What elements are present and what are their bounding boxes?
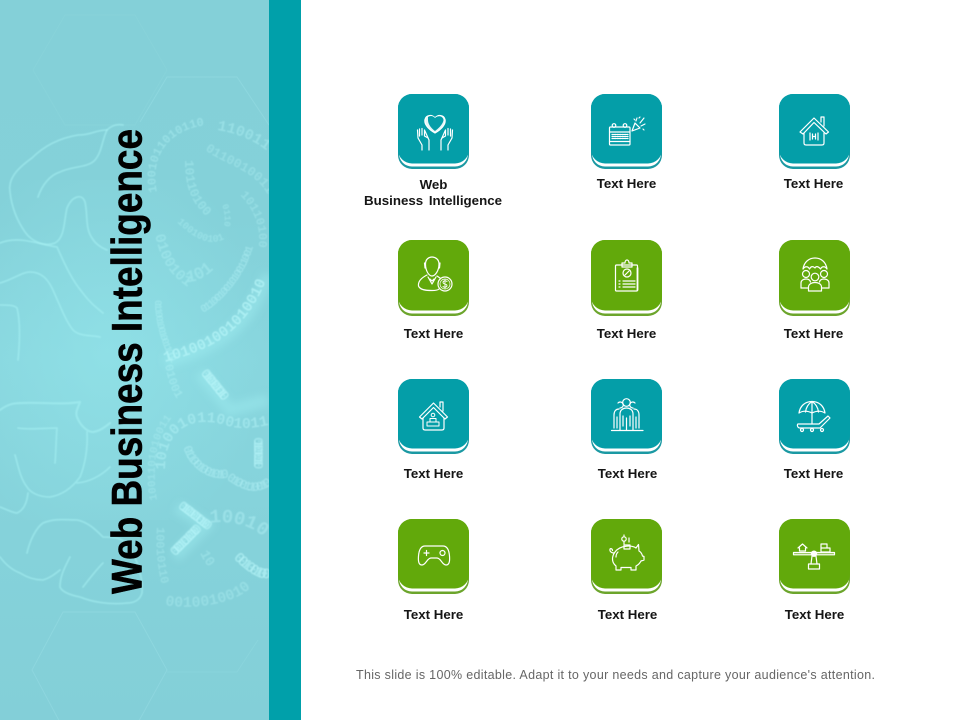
icon: beach umbrella and lounger <box>797 402 830 432</box>
label: Web <box>420 177 447 192</box>
binary spiral text: 0110010011 <box>207 144 269 194</box>
tile: calendar and party popper <box>591 94 662 169</box>
binary spiral text: 01001101100100 <box>170 524 201 555</box>
binary spiral text: 01100100110 <box>254 438 264 469</box>
binary spiral text: 0110010010011001 <box>155 300 176 362</box>
label: Text Here <box>404 607 463 622</box>
soft glow behind bright binary bands <box>165 275 268 557</box>
hexagon outlines <box>32 15 269 720</box>
label: Text Here <box>784 466 843 481</box>
icon: family under umbrella <box>801 258 829 291</box>
tile: businessman with dollar <box>398 240 469 316</box>
icon: game controller <box>418 546 450 565</box>
accent band <box>269 0 301 720</box>
icon: balance scale <box>794 544 834 569</box>
binary spiral text: 1001101010011 <box>148 416 170 500</box>
label: Text Here <box>785 607 844 622</box>
binary spiral text: 101 <box>186 263 213 282</box>
panel: left decorative sidebar <box>0 0 269 720</box>
label: Text Here <box>404 326 463 341</box>
icon: house with person <box>420 402 448 430</box>
tile: group of people <box>591 379 662 454</box>
label: Text Here <box>597 326 656 341</box>
icon: clipboard <box>616 260 638 291</box>
label: Text Here <box>404 466 463 481</box>
label: Text Here <box>784 326 843 341</box>
label: Text Here <box>598 466 657 481</box>
binary spiral text: 101001001010010 <box>164 279 264 362</box>
binary spiral text: 01001 <box>166 365 182 398</box>
tile: balance scale <box>779 519 850 594</box>
binary spiral text: 0100101 <box>156 234 190 286</box>
footer caption: This slide is 100% editable. Adapt it to your needs and capture your audience's attention. <box>356 668 875 682</box>
tile: home gym <box>779 94 850 169</box>
tile: home with person <box>398 379 469 454</box>
tile: beach umbrella and lounger <box>779 379 850 454</box>
tile: game controller <box>398 519 469 594</box>
binary spiral text: 110011 <box>218 121 269 150</box>
binary spiral text: 10 <box>201 551 214 566</box>
binary spiral text: 00100100 <box>235 552 269 579</box>
tile: clipboard <box>591 240 662 316</box>
binary spiral text: 0110010010110 <box>202 369 229 400</box>
binary spiral text: 10110100 <box>185 161 211 214</box>
binary spiral text <box>148 118 269 607</box>
brain outline <box>0 125 142 604</box>
label: Text Here <box>597 176 656 191</box>
tile: hands holding heart <box>398 94 469 169</box>
icon: hands and heart <box>418 115 452 150</box>
title: Web Business Intelligence <box>104 129 152 594</box>
icon: businessman and coin <box>418 257 452 291</box>
tile: piggy bank <box>591 519 662 594</box>
binary spiral text: 0110 <box>223 204 230 226</box>
icon: calendar <box>610 117 645 145</box>
binary spiral text: 01100100101100 <box>179 501 212 530</box>
label: Business Intelligence <box>364 193 502 208</box>
binary spiral text: 100100101 <box>178 219 224 242</box>
binary spiral text: 10010110 <box>156 528 168 583</box>
icon: piggy bank <box>610 535 644 570</box>
tile: family under umbrella <box>779 240 850 316</box>
label: Text Here <box>598 607 657 622</box>
icon: house with dumbbell <box>800 117 828 145</box>
binary spiral text: 10110100 <box>241 192 267 247</box>
label: Text Here <box>784 176 843 191</box>
binary spiral text: 10010 <box>210 510 268 534</box>
icon: group of people <box>612 399 643 430</box>
